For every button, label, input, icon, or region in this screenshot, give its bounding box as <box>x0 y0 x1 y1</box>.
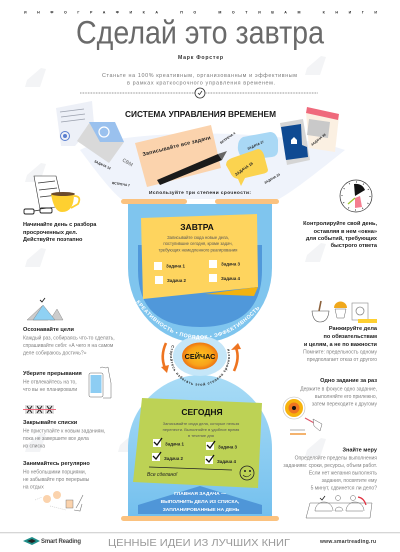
arc text: values: КРЕАТИВНОСТЬ • ПОРЯДОК • ЭФФЕКТИВНОСТЬ <box>136 300 260 340</box>
tip: one task <box>300 378 377 408</box>
icon: phone <box>280 119 310 165</box>
tip: know the measure: 5 минут, сдвинется ли дело? <box>311 486 377 492</box>
divider with clock icon <box>80 88 318 98</box>
tip: control the day: быстрого ответа <box>331 242 378 249</box>
icons: obligations <box>312 301 377 323</box>
sticky: tomorrow: Записывайте сюда новые дела, <box>167 235 229 240</box>
icon: document with stamp <box>56 101 94 146</box>
arc text: avoid: Старайтесь избегать этой степени срочности <box>169 346 230 386</box>
tip: interruptions: что вы не планировали <box>23 387 77 393</box>
card: write all tasks: Записывайте все задачи <box>142 134 211 158</box>
lower bulb <box>128 375 272 516</box>
floating labels: ЗАДАЧА 24 <box>264 172 281 185</box>
sticky: tomorrow: Задача 2 <box>167 278 187 283</box>
sticky: today: Записывайте сюда дела, которые нельзя <box>163 421 239 426</box>
upper bulb inner <box>138 245 262 327</box>
icon: domes <box>306 496 372 518</box>
tip: control the day <box>303 220 378 249</box>
sun: now <box>182 342 218 370</box>
tip: start the day: Действуйте поэтапно <box>23 236 83 243</box>
tip: regularly: не забывайте про перерывы <box>23 476 90 483</box>
main task: ЗАПЛАНИРОВАННЫЕ НА ДЕНЬ <box>163 507 240 513</box>
glow around sun <box>173 336 227 376</box>
author: Марк Форстер <box>178 55 223 61</box>
tip: interruptions: Уберите прерывания <box>23 370 82 377</box>
tip: one task: Одно задание за раз <box>320 378 377 384</box>
tip: interruptions: Не отвлекайтесь на то, <box>23 378 77 386</box>
tip: know the measure: Определяйте пределы выполнения <box>295 454 377 462</box>
icon: pen <box>157 151 227 185</box>
tip: know the measure: заданиям: сроки, ресурсы, объем работ. <box>283 463 377 469</box>
footer slogan: ЦЕННЫЕ ИДЕИ ИЗ ЛУЧШИХ КНИГ <box>108 537 290 549</box>
urgency caption: Используйте три степени срочности: <box>149 189 251 196</box>
tip: rank tasks: Помните: предельность одному <box>303 350 377 356</box>
sticky: today: перенести. Выполняйте в удобное время <box>163 427 239 432</box>
hourglass <box>121 199 279 521</box>
tip: rank tasks: и целям, а не по важности <box>304 342 378 348</box>
sticky: today: Все сделано! <box>147 472 178 478</box>
floating labels <box>94 131 281 187</box>
tip: one task: выполняйте его прилежно, <box>315 393 377 400</box>
icon: calendar <box>306 107 339 152</box>
sticky: tomorrow: Задача 1 <box>166 264 186 268</box>
tip: start the day <box>23 221 97 243</box>
tip: one task: Держите в фокусе одно задание, <box>300 386 377 392</box>
bottom bar <box>121 516 279 521</box>
tip: control the day: Контролируйте свой день, <box>303 220 377 227</box>
tip: rank tasks <box>303 325 378 363</box>
top caption: ИНФОГРАФИКА ПО МОТИВАМ КНИГИ <box>24 10 377 14</box>
top bar left <box>121 199 187 204</box>
sticky: tomorrow: поступившие сегодня, кроме задач, <box>163 241 233 246</box>
title: Сделай это завтра <box>76 14 324 50</box>
background funnel <box>80 134 345 199</box>
tip: regularly <box>23 460 90 490</box>
sticky: today: СЕГОДНЯ <box>181 407 223 417</box>
icon: crossed list <box>23 405 56 414</box>
tip: goals: деле собираюсь достичь?» <box>23 350 87 356</box>
floating labels: СВМ <box>121 158 134 168</box>
tip: start the day: Начинайте день с разбора <box>23 221 97 228</box>
subtitle: Станьте на 100% креативным, организованным и эффективным <box>102 73 297 79</box>
icon: coffee and papers <box>24 176 79 214</box>
sticky: today: Задача 2 <box>164 456 184 461</box>
tip: close lists: Не приступайте к новым заданиям, <box>23 428 105 434</box>
sticky: tomorrow: Задача 4 <box>221 276 241 281</box>
section heading: СИСТЕМА УПРАВЛЕНИЯ ВРЕМЕНЕМ <box>125 109 276 119</box>
sticky: today: Задача 1 <box>165 442 185 446</box>
tip: regularly: Но небольшими порциями, <box>23 470 86 476</box>
top bar right <box>215 199 279 204</box>
floating labels: ВСТРЕЧА 7 <box>112 181 130 187</box>
tip: regularly: Занимайтесь регулярно <box>23 460 90 467</box>
tip: goals: Каждый раз, собираясь что-то сделать, <box>23 334 115 342</box>
tip: interruptions <box>23 370 82 393</box>
subtitle: в рамках краткосрочного управления временем. <box>127 80 275 86</box>
footer line <box>0 532 400 533</box>
sticky: tomorrow: требующих немедленного реагирования <box>159 248 237 252</box>
tip: goals: спрашивайте себя: «А чего я на самом <box>23 342 114 349</box>
tip: close lists <box>23 419 105 450</box>
tip: one task: затем переходите к другому <box>312 402 377 408</box>
upper bulb <box>128 204 272 343</box>
icon: target and darts <box>283 397 322 434</box>
tip: rank tasks: предполагает отказ от другого <box>307 357 377 363</box>
tip: know the measure: Если нет желания выполнять <box>309 470 377 476</box>
lower triangle <box>138 486 262 514</box>
tip: close lists: из списка <box>23 444 45 450</box>
tip: know the measure <box>283 446 378 492</box>
arrows around the sun <box>161 343 241 373</box>
tip: know the measure: Знайте меру <box>342 446 378 454</box>
bubble: task 27 <box>238 132 278 160</box>
main task: ВЫПОЛНИТЬ ДЕЛА ИЗ СПИСКА, <box>161 499 240 505</box>
tip: rank tasks: по обязательствам <box>323 333 377 340</box>
icon: envelope <box>77 122 124 163</box>
icon: pots and broom <box>35 491 83 511</box>
sticky: today: Задача 4 <box>217 459 237 464</box>
bubble: task 16: ЗАДАЧА 16 <box>234 161 254 177</box>
floating labels: ВСТРЕЧА 4 <box>219 131 236 145</box>
tip: start the day: просроченных дел. <box>23 230 78 236</box>
sun: now: СЕЙЧАС <box>185 352 216 361</box>
tip: control the day: оставляя в нем «окна» <box>314 229 377 235</box>
bubble: task 16 <box>226 149 268 186</box>
sticky: today: в течение дня <box>188 433 214 438</box>
card: write all tasks <box>135 125 221 187</box>
tip: goals <box>23 326 115 356</box>
bubble: task 27: ЗАДАЧА 27 <box>247 140 265 151</box>
sticky: today: Задача 3 <box>218 444 238 450</box>
sticky: today <box>133 398 262 488</box>
main task <box>161 491 240 513</box>
tip: close lists: пока не завершите все дела <box>23 436 89 442</box>
sticky: tomorrow <box>141 214 258 299</box>
floating labels: ЗАДАЧА 12 <box>94 159 112 170</box>
tip: close lists: Закрывайте списки <box>23 419 78 426</box>
tip: control the day: для событий, требующих <box>306 235 378 242</box>
tip: rank tasks: Ранжируйте дела <box>329 325 378 332</box>
icon: mountains <box>27 298 63 320</box>
logo: Smart Reading <box>41 539 81 545</box>
icon: clock <box>340 180 372 212</box>
main task: ГЛАВНАЯ ЗАДАЧА — <box>174 491 226 497</box>
tip: goals: Осознавайте цели <box>23 326 74 333</box>
logo <box>23 537 81 545</box>
sticky: tomorrow: ЗАВТРА <box>180 222 214 232</box>
sticky: tomorrow: Задача 3 <box>221 262 241 266</box>
icon: calendar: ЗАДАЧА 38 <box>310 133 327 147</box>
website: www.smartreading.ru <box>319 539 376 545</box>
tip: regularly: на отдых <box>23 484 44 490</box>
tip: know the measure: задания, посвятите ему <box>322 478 377 484</box>
icon: cat and phone <box>89 367 111 398</box>
subtitle <box>102 73 297 86</box>
